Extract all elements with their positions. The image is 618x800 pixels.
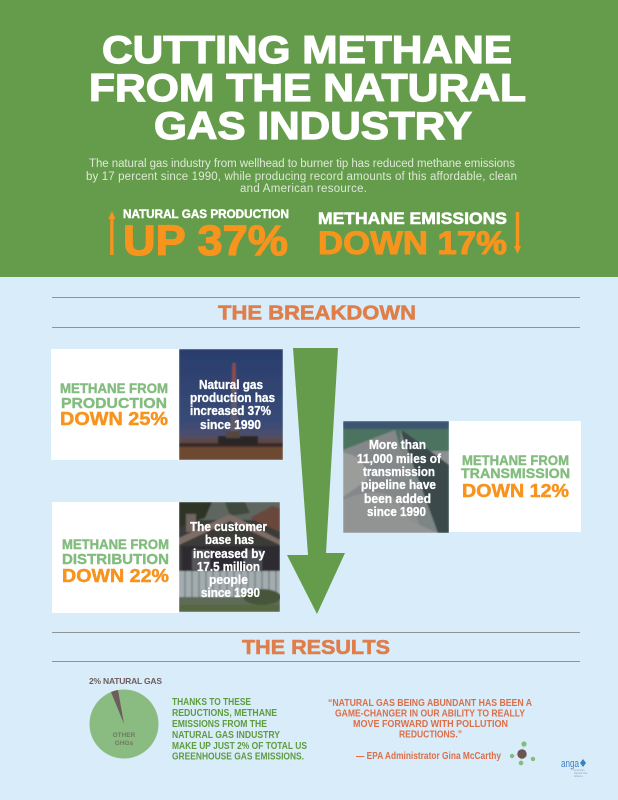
label: methane from distribution: DISTRIBUTION <box>62 551 169 568</box>
stat: natural gas production up 37%: NATURAL GAS PRODUCTION <box>123 209 289 221</box>
results statement: EMISSIONS FROM THE <box>172 718 267 730</box>
label: methane from distribution: DOWN 22% <box>62 566 169 586</box>
results statement: THANKS TO THESE <box>172 696 251 708</box>
panel: production <box>51 349 283 460</box>
logo: anga: Alliance <box>574 775 583 778</box>
intro text: and American resource. <box>240 183 367 195</box>
header band <box>0 0 618 277</box>
photo text: Natural gas <box>199 377 263 392</box>
photo text: production has <box>190 390 275 405</box>
photo text: increased 37% <box>190 403 271 418</box>
label: methane from production: PRODUCTION <box>61 395 167 412</box>
photo text: pipeline have <box>361 477 436 492</box>
photo text <box>190 377 275 432</box>
photo text: base has <box>205 532 254 547</box>
photo text: More than <box>369 437 426 452</box>
icon: up arrow <box>108 211 116 255</box>
stat: methane emissions down 17%: DOWN 17% <box>318 225 507 261</box>
photo text: The customer <box>190 519 267 534</box>
photo text: since 1990 <box>367 504 426 519</box>
label: methane from transmission <box>461 453 570 501</box>
logo: anga: Natural Gas <box>574 772 588 775</box>
label: methane from transmission: METHANE FROM <box>462 453 569 468</box>
photo text: increased by <box>193 546 266 561</box>
label: methane from production: METHANE FROM <box>60 381 168 396</box>
title: FROM THE NATURAL <box>89 67 526 110</box>
label: methane from distribution <box>62 537 169 586</box>
photo text: transmission <box>363 464 435 479</box>
title: CUTTING METHANE <box>102 29 512 72</box>
pie label: other GHGs: OTHER <box>113 732 136 739</box>
stat: methane emissions down 17%: METHANE EMISSIONS <box>318 209 507 228</box>
pie chart <box>89 676 162 758</box>
photo text: people <box>209 572 248 587</box>
photo text: been added <box>364 491 431 506</box>
pie label: other GHGs: GHGs <box>115 740 134 747</box>
photo text <box>357 437 442 519</box>
logo: anga <box>561 758 588 778</box>
results statement <box>172 696 307 762</box>
quote attribution: — EPA Administrator Gina McCarthy <box>356 750 501 762</box>
title: GAS INDUSTRY <box>154 105 472 148</box>
quote: “NATURAL GAS BEING ABUNDANT HAS BEEN A <box>328 697 532 709</box>
heading: the breakdown: THE BREAKDOWN <box>218 302 416 324</box>
photo text <box>190 519 267 600</box>
intro text: by 17 percent since 1990, while producing record amounts of this affordable, clean <box>86 171 517 183</box>
results statement: REDUCTIONS, METHANE <box>172 707 277 719</box>
results statement: NATURAL GAS INDUSTRY <box>172 729 280 741</box>
big green down arrow <box>287 348 345 614</box>
photo text: since 1990 <box>201 585 260 600</box>
photo: drilling rig <box>179 349 283 460</box>
stat: natural gas production up 37%: UP 37% <box>123 217 288 265</box>
label: methane from transmission: DOWN 12% <box>462 481 569 501</box>
intro text <box>86 158 517 195</box>
label: methane from production: DOWN 25% <box>60 409 168 429</box>
photo text: 17.5 million <box>197 559 260 574</box>
pie label: natural gas: 2% NATURAL GAS <box>89 676 162 686</box>
heading: the results: THE RESULTS <box>242 636 390 659</box>
results statement: MAKE UP JUST 2% OF TOTAL US <box>172 740 307 752</box>
photo text: 11,000 miles of <box>357 451 442 466</box>
panel: transmission <box>343 421 581 533</box>
label: methane from distribution: METHANE FROM <box>62 537 169 552</box>
stat: methane emissions down 17% <box>318 209 507 261</box>
label: methane from production <box>60 381 168 429</box>
photo: pipeline <box>343 421 449 533</box>
quote: REDUCTIONS.” <box>399 728 462 740</box>
title <box>89 29 526 148</box>
label: methane from transmission: TRANSMISSION <box>461 465 570 481</box>
logo: anga: anga <box>561 758 580 770</box>
photo: house with fence <box>179 502 281 612</box>
results statement: GREENHOUSE GAS EMISSIONS. <box>172 750 304 762</box>
logo: anga: American <box>574 769 585 772</box>
quote <box>328 697 532 762</box>
pie label: other GHGs <box>113 732 136 747</box>
quote: GAME-CHANGER IN OUR ABILITY TO REALLY <box>335 708 525 720</box>
photo text: since 1990 <box>200 417 261 432</box>
quote: MOVE FORWARD WITH POLLUTION <box>353 718 508 730</box>
intro text: The natural gas industry from wellhead to burner tip has reduced methane emissions <box>89 158 515 170</box>
icon: molecule <box>510 741 535 765</box>
icon: down arrow <box>514 212 521 254</box>
panel: distribution <box>52 502 281 613</box>
